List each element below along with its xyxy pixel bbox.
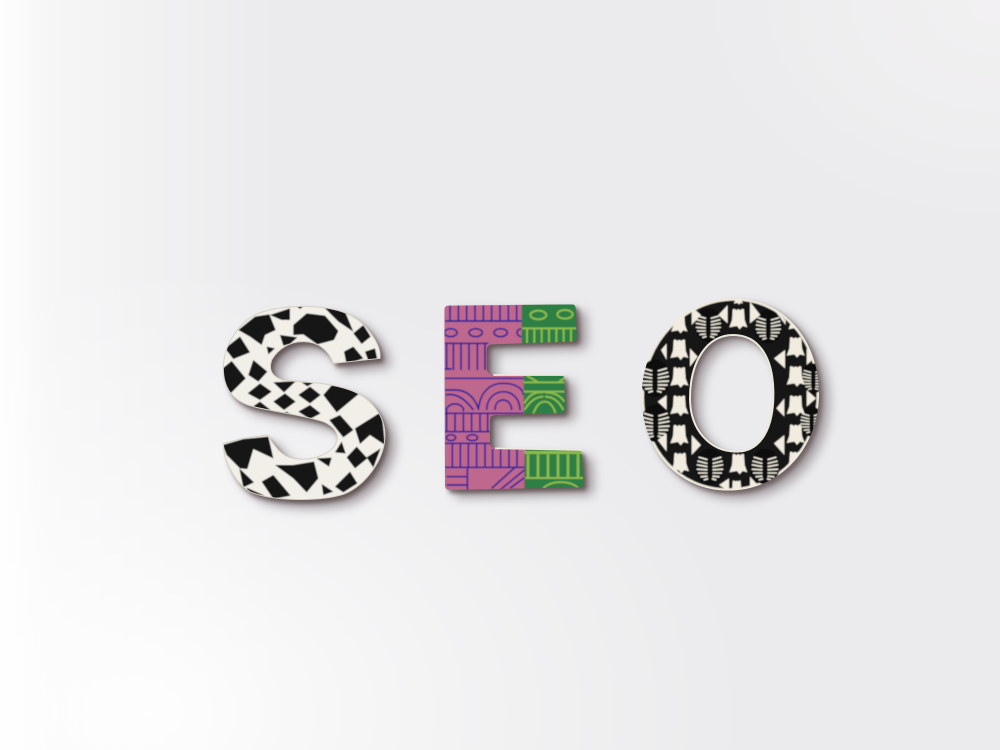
O inner hole edge	[690, 335, 773, 452]
letter E	[435, 295, 593, 500]
O triangles	[658, 302, 816, 492]
E inner edge highlight	[493, 375, 582, 450]
S checker pattern	[224, 306, 384, 499]
O cream rim	[642, 298, 819, 491]
E pink section	[444, 304, 526, 490]
O patterned surface	[642, 298, 819, 490]
O leaf motifs	[640, 308, 826, 484]
E patterned paper	[444, 304, 584, 490]
E drop shadow	[448, 308, 593, 497]
E green section	[522, 302, 585, 490]
O tulip motifs	[670, 294, 805, 495]
S drop shadow	[227, 310, 395, 508]
letter S	[210, 295, 400, 510]
S edge	[223, 306, 385, 500]
letter O	[635, 290, 830, 500]
O drop shadow	[645, 302, 829, 499]
